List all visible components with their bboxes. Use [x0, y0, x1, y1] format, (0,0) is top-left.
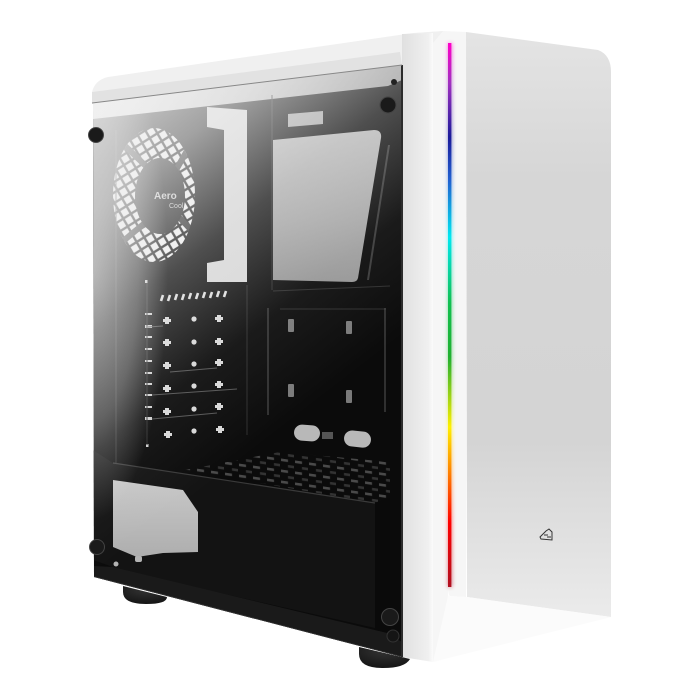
foot: right — [359, 647, 410, 668]
PSU shroud front — [94, 450, 116, 560]
screw: lower corner — [387, 630, 399, 642]
motherboard standoff holes — [163, 315, 224, 438]
screw: top left — [88, 128, 104, 142]
illustration: PC case — [88, 31, 611, 668]
fan grill — [113, 128, 195, 262]
motherboard tray lines — [116, 95, 390, 470]
fan logo text — [154, 192, 183, 208]
glass left reflection — [93, 116, 163, 507]
bottom frame bar — [94, 566, 402, 657]
fan logo text: Cool — [169, 203, 184, 210]
interior base — [90, 60, 405, 660]
fan hub — [135, 158, 185, 234]
panel: glass side window — [93, 66, 401, 657]
panel: front face — [466, 32, 611, 617]
screw: bottom left — [90, 540, 104, 554]
panel: floor reflection under front panel — [433, 595, 611, 662]
RGB light strip — [448, 43, 452, 587]
screw: upper corner small — [391, 79, 397, 85]
cage side slit — [367, 145, 390, 280]
glass top edge — [92, 65, 402, 103]
screw: top right — [380, 97, 396, 113]
top interior band — [93, 65, 402, 119]
screw: bottom right — [382, 608, 398, 626]
panel: top highlight band — [92, 52, 402, 103]
PSU window — [113, 480, 198, 557]
glass right edge — [401, 65, 403, 657]
motherboard slot row — [161, 291, 226, 301]
small drive cage tab — [288, 111, 323, 127]
icon: brand logo — [540, 529, 552, 540]
bottom frame highlight — [94, 577, 402, 657]
cable tie slots column — [145, 280, 152, 447]
foot: left — [123, 586, 167, 604]
drive cage window — [273, 130, 381, 282]
panel: case side strip — [402, 33, 433, 662]
right shroud side — [375, 498, 390, 633]
fan logo text: Aero — [154, 191, 177, 202]
white bracket — [207, 107, 247, 282]
shroud top edge — [113, 463, 375, 503]
panel: lower front return — [433, 596, 611, 662]
glass white reflection — [93, 66, 401, 510]
panel: top of case — [92, 31, 445, 104]
drive bay slots — [293, 424, 372, 448]
panel: front bevel strip — [433, 31, 466, 662]
PSU shroud top vents — [185, 452, 390, 503]
fan — [113, 128, 195, 262]
rear cage bracket holes — [288, 319, 352, 403]
PSU mount holes — [114, 556, 142, 566]
